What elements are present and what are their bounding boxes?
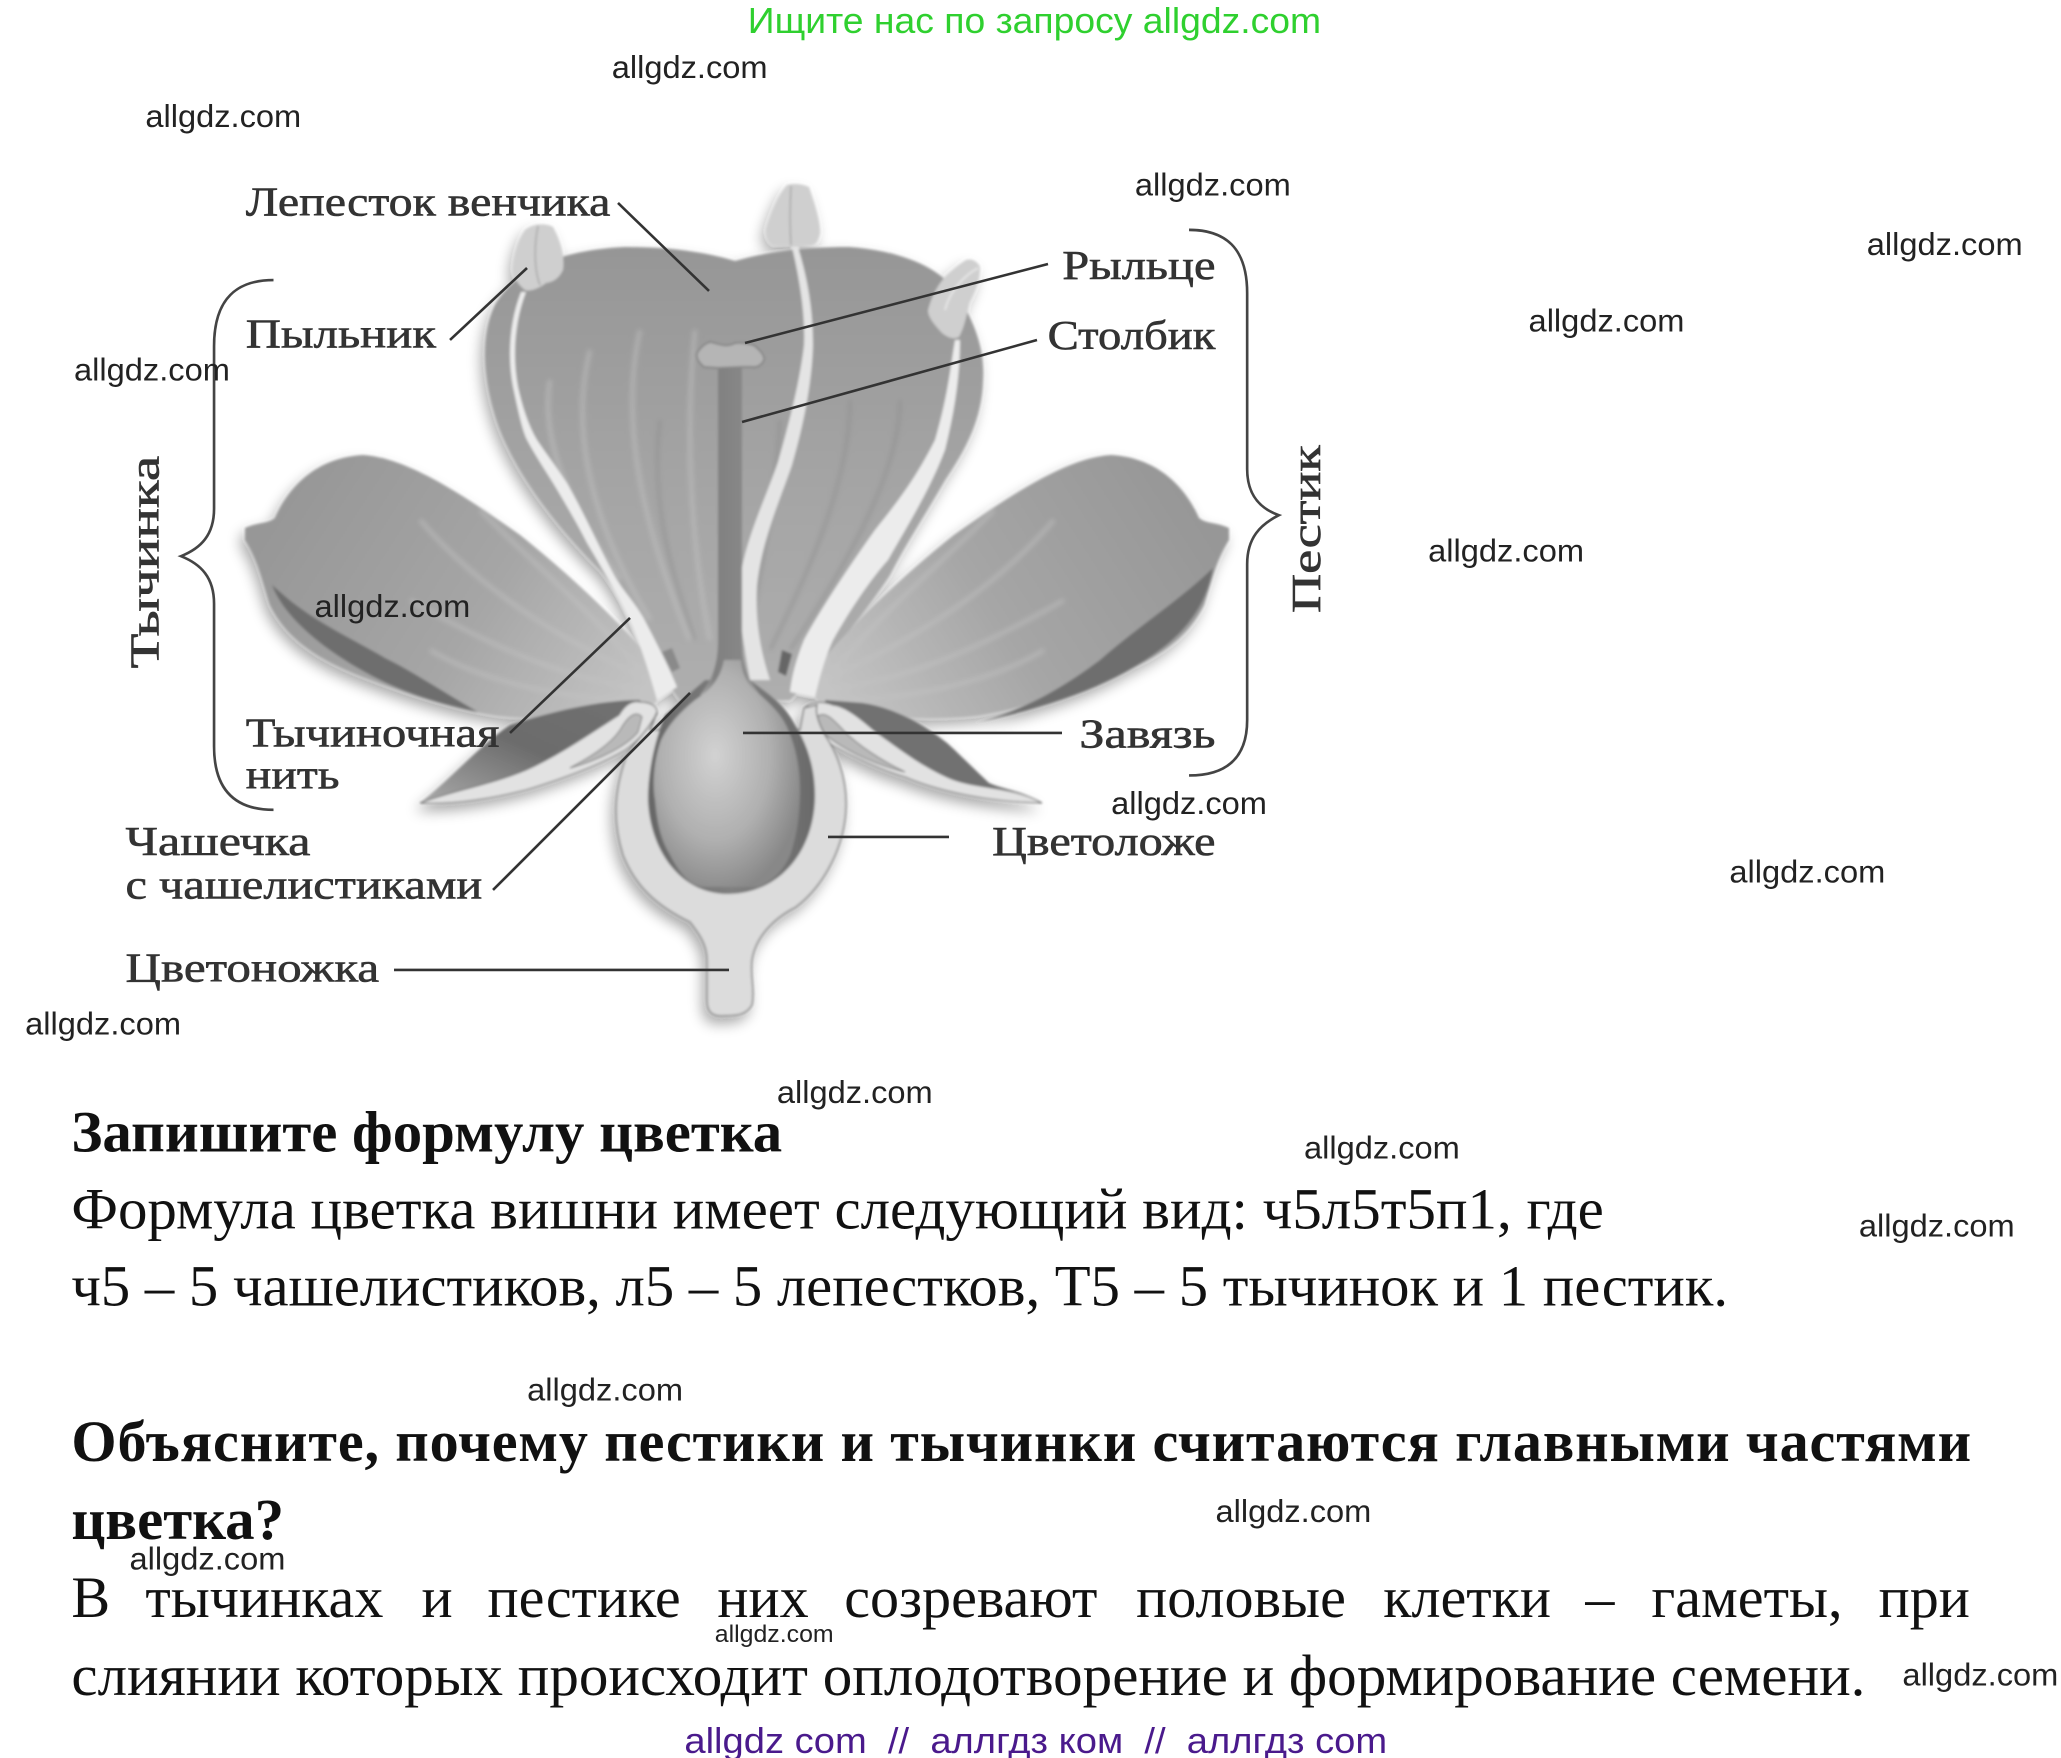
diagram labels: Тычиночная (246, 710, 500, 755)
receptacle cavity (648, 680, 815, 894)
brace: pistil (1189, 230, 1279, 775)
top petal (485, 247, 983, 700)
answer text: В (71, 1565, 110, 1630)
watermarks: allgdz.com (1867, 226, 2023, 262)
diagram labels: с чашелистиками (126, 862, 482, 907)
heading: question (71, 1409, 1971, 1552)
diagram labels (123, 179, 1329, 991)
watermarks: allgdz.com (1111, 785, 1267, 821)
diagram labels: Завязь (1079, 712, 1215, 757)
search banner: Ищите нас по запросу allgdz.com (748, 1, 1321, 41)
watermarks: allgdz.com (1428, 532, 1584, 568)
heading: question: цветка? (71, 1487, 284, 1552)
formula text: ч5 – 5 чашелистиков, л5 – 5 лепестков, Т5 – 5 тычинок и 1 пестик. (71, 1253, 1728, 1318)
diagram labels: Лепесток венчика (246, 179, 610, 224)
watermarks: allgdz.com (777, 1074, 933, 1110)
watermarks: allgdz.com (74, 351, 230, 387)
diagram labels: нить (246, 753, 340, 798)
diagram labels: Рыльце (1062, 243, 1215, 288)
watermarks: allgdz.com (1215, 1493, 1371, 1529)
ovary (654, 660, 800, 887)
answer text: пестике (488, 1565, 681, 1630)
answer text: и (421, 1565, 453, 1630)
watermarks: allgdz.com (1729, 854, 1885, 890)
answer text: гаметы, (1651, 1565, 1843, 1630)
watermarks: allgdz.com (25, 1005, 181, 1041)
watermarks: allgdz.com (527, 1371, 683, 1407)
answer text: половые (1136, 1565, 1346, 1630)
watermarks: allgdz.com (1304, 1130, 1460, 1166)
watermarks: allgdz.com (1135, 167, 1291, 203)
leader lines (394, 203, 1062, 970)
answer text: клетки (1383, 1565, 1551, 1630)
watermarks: allgdz.com (612, 49, 768, 85)
right petal (807, 455, 1229, 723)
flower illustration (245, 184, 1229, 1016)
watermarks: allgdz.com (314, 588, 470, 624)
left stamen (510, 224, 680, 700)
diagram labels: Столбик (1048, 313, 1216, 358)
right sepal (804, 700, 1042, 803)
heading: flower formula: Запишите формулу цветка (71, 1099, 782, 1164)
answer text: тычинках (145, 1565, 383, 1630)
style (700, 368, 760, 695)
diagram labels: Цветоложе (992, 819, 1215, 864)
diagram labels: Цветоножка (126, 946, 379, 991)
watermarks: allgdz.com (1902, 1657, 2058, 1693)
formula text: Формула цветка вишни имеет следующий вид: ч5л5т5п1, где (71, 1177, 1604, 1242)
diagram labels: Чашечка (126, 819, 310, 864)
receptacle and pedicel (616, 705, 846, 1016)
left petal (245, 455, 667, 718)
watermarks: allgdz.com (145, 98, 301, 134)
answer text: – (1584, 1565, 1615, 1630)
watermarks: allgdz.com (715, 1621, 834, 1648)
formula text (71, 1177, 1728, 1318)
answer text: созревают (844, 1565, 1097, 1630)
answer text (71, 1565, 1970, 1708)
watermarks: allgdz.com (1859, 1208, 2015, 1244)
diagram labels: Пестик (1284, 445, 1329, 613)
stigma (697, 342, 764, 368)
diagram labels: Тычинка (123, 456, 168, 668)
watermarks: allgdz.com (1529, 303, 1684, 339)
center stamen (740, 184, 820, 680)
right stamen (778, 259, 980, 697)
answer text: при (1879, 1565, 1970, 1630)
flower diagram (123, 179, 1329, 1016)
diagram labels: Пыльник (246, 311, 436, 356)
answer text: них (717, 1565, 809, 1630)
left sepal (420, 700, 657, 803)
brace: stamen (181, 280, 274, 810)
answer text: слиянии которых происходит оплодотворение и формирование семени. (71, 1643, 1865, 1708)
heading: question: Объясните, почему пестики и тычинки считаются главными частями (71, 1409, 1971, 1474)
watermarks: allgdz.com (130, 1540, 285, 1576)
